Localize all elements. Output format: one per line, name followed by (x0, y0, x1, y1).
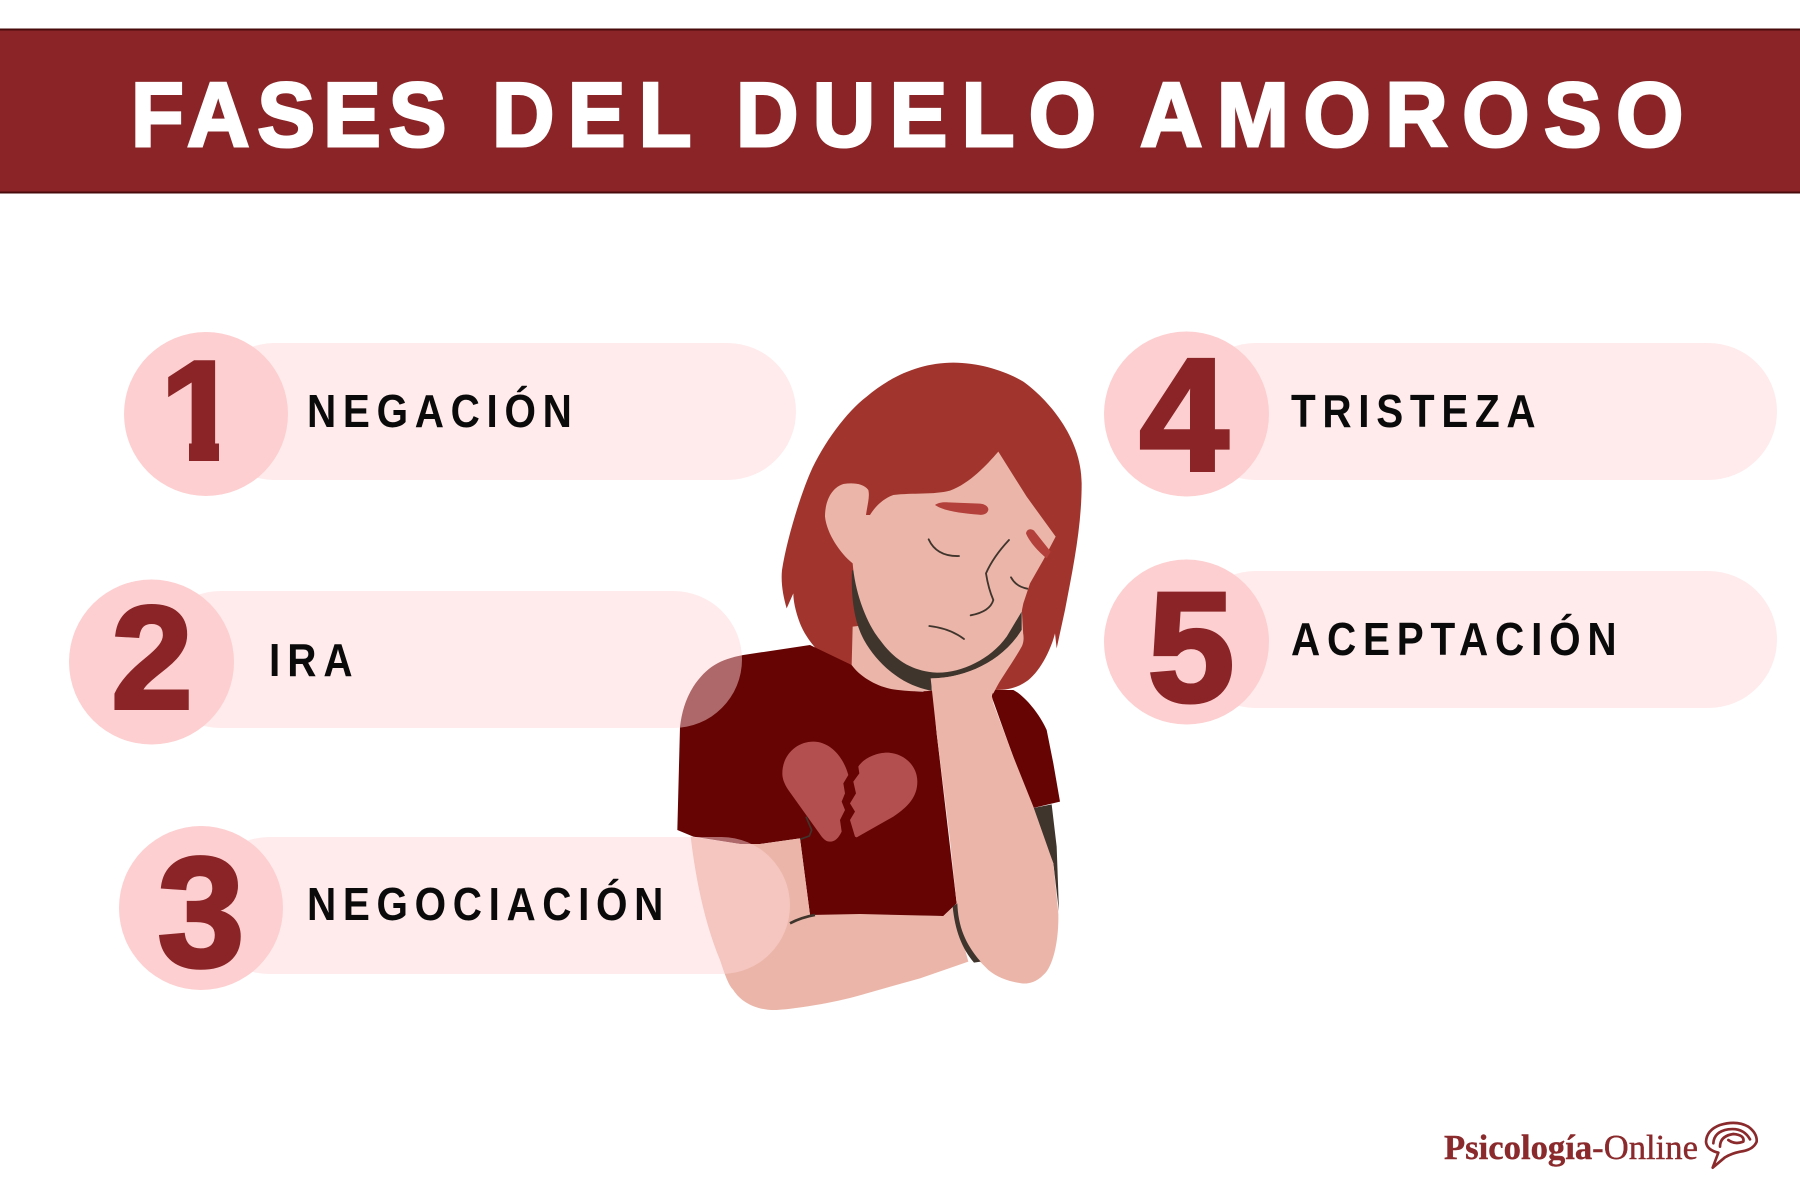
eyebrows (935, 502, 1051, 558)
title banner (0, 28, 1800, 194)
heart broken (782, 742, 917, 842)
face and ear (825, 452, 1056, 673)
hair (782, 363, 1082, 690)
step 4: tristeza (1104, 325, 1777, 504)
label 3: NEGOCIACIÓN (307, 879, 663, 931)
pill 4 (1187, 343, 1777, 480)
label 4: TRISTEZA (1291, 387, 1536, 438)
number 3: 3 (158, 826, 244, 1000)
right underarm shadow (1032, 804, 1059, 912)
step 1: negación (124, 332, 796, 496)
sleeve shadow (800, 817, 812, 839)
circle 5 (1104, 560, 1269, 724)
neck (852, 607, 1023, 693)
logo: Psicología-Online (1444, 1123, 1757, 1168)
eyes, nose, mouth (929, 539, 1027, 639)
illustration: sad woman with broken heart shirt (677, 363, 1082, 1010)
circle 4 (1104, 332, 1269, 496)
title: DEL (492, 64, 692, 165)
right arm and hand (931, 630, 1058, 984)
number 2: 2 (111, 576, 193, 739)
label 2: IRA (269, 636, 353, 687)
label 5: ACEPTACIÓN (1291, 614, 1617, 666)
number 5: 5 (1148, 561, 1234, 735)
number 4: 4 (1140, 325, 1229, 504)
pill 5 (1187, 571, 1777, 708)
title: AMOROSO (1140, 64, 1683, 165)
circle 3 (119, 826, 283, 990)
step 2: ira (69, 576, 742, 744)
arm line (790, 915, 815, 923)
neck shadow (852, 570, 1022, 691)
icon: brain speech bubble (1706, 1123, 1757, 1168)
forearm shadow (953, 903, 981, 963)
title (131, 64, 1683, 165)
number 1: 1 (161, 332, 239, 491)
title: FASES (131, 64, 446, 165)
title: DUELO (736, 64, 1096, 165)
label 1: NEGACIÓN (307, 386, 572, 438)
pill 3 (201, 837, 790, 974)
logo text: Psicología-Online (1444, 1128, 1698, 1167)
pill 1 (206, 343, 796, 480)
left arm (691, 837, 968, 1010)
circle 1 (124, 332, 288, 496)
pill 2 (152, 591, 742, 728)
circle 2 (69, 580, 234, 744)
step 3: negociación (119, 826, 790, 1000)
step 5: aceptación (1104, 560, 1777, 735)
shirt right sleeve (992, 690, 1060, 808)
shirt (677, 645, 957, 916)
